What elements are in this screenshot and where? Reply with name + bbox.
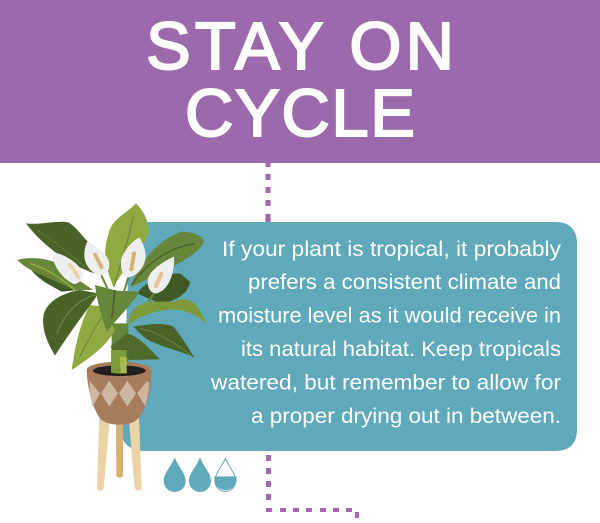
body text: prefers a consistent climate and [248,271,561,294]
leaf: top centre light [105,203,149,287]
icon: potted peace lily [17,203,207,370]
title: CYCLE [185,76,415,151]
leaf: bottom left light [72,305,115,370]
dark leaf behind left [28,265,80,292]
dotted connector: top [266,163,270,222]
drop 1 [164,457,186,492]
leaf: right middle light [128,299,207,325]
pot diamonds [89,381,149,407]
body text: watered, but remember to allow for [210,372,561,394]
leaf: left light [17,258,93,290]
title: STAY ON [146,9,454,84]
drop 3 partly filled [214,458,237,491]
title banner [0,0,600,163]
title [146,9,454,151]
leaf: right upper [130,232,204,287]
body text [210,238,562,428]
plant stem in pot [111,350,127,374]
dark leaf behind right [137,273,190,303]
dotted connector: bottom [266,455,359,518]
leaf: top left dark [26,222,95,273]
body text: If your plant is tropical, it probably [222,238,562,261]
icon: plant stand legs [97,417,142,491]
icon: pot [87,350,152,425]
leaf: lower right dark [133,324,194,358]
drop 2 [189,457,211,492]
icon: water drops [164,457,237,492]
body text: moisture level as it would receive in [218,304,561,328]
body text: a proper drying out in between. [251,405,561,428]
leaf: centre [95,285,140,332]
leaf: bottom centre [111,333,160,360]
flowers [53,237,174,302]
text panel [122,222,577,451]
body text: its natural habitat. Keep tropicals [241,338,561,361]
stem [112,323,128,370]
leaf: lower left dark [43,290,98,356]
